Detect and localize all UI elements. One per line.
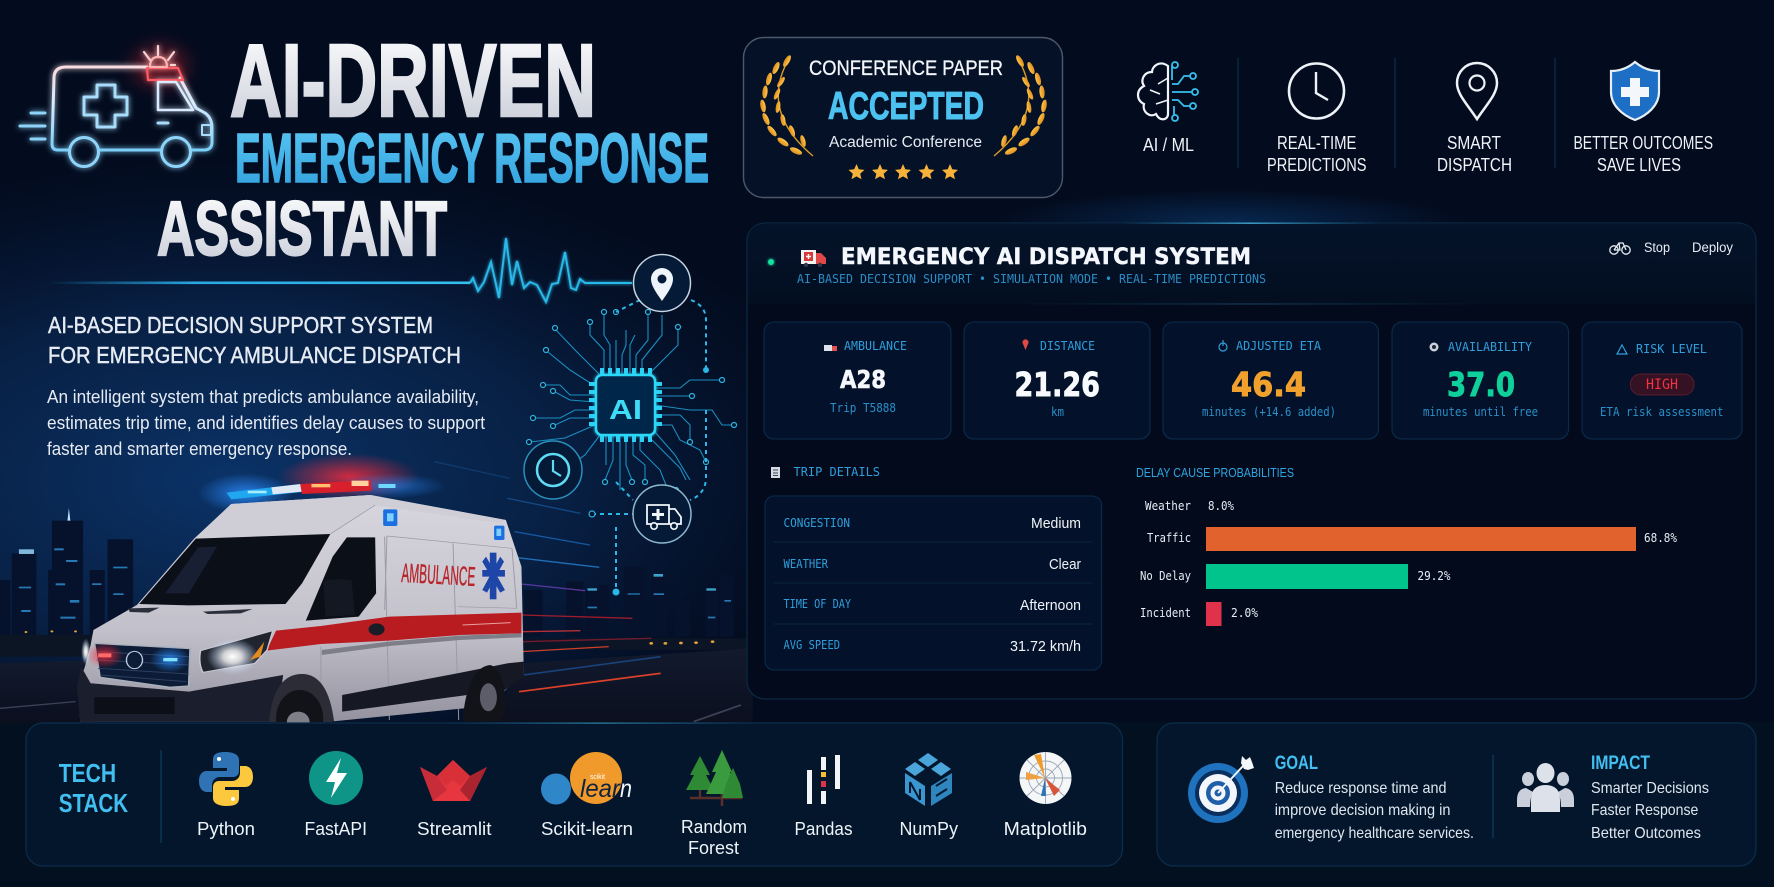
- card: distance: km: [1051, 404, 1064, 419]
- fastapi: [304, 751, 367, 839]
- row: weather: [784, 556, 1081, 573]
- impact text: Better Outcomes: [1591, 825, 1701, 842]
- real-time feature: REAL-TIME: [1277, 132, 1356, 153]
- grille: [94, 643, 190, 687]
- ambulance emoji: [801, 250, 826, 267]
- people icon: [1517, 763, 1574, 812]
- conference paper badge: [744, 38, 1062, 198]
- target icon: [1188, 756, 1254, 823]
- road and barrier: [0, 462, 753, 723]
- heartbeat line: [47, 238, 632, 302]
- smart dispatch feature: [1437, 63, 1512, 175]
- clock node: [524, 441, 582, 499]
- ambulance node: [633, 485, 691, 543]
- ambulance photo illustration: [77, 453, 524, 747]
- bar: traffic: 68.8%: [1644, 530, 1677, 545]
- side lights: [383, 509, 397, 526]
- card: ambulance: [764, 322, 951, 439]
- fastapi: FastAPI: [304, 818, 367, 839]
- row: congestion: CONGESTION: [784, 515, 850, 530]
- hood vents: [128, 608, 252, 614]
- ambulance photo illustration: AMBULANCE: [401, 558, 476, 592]
- python: [197, 752, 255, 839]
- smart dispatch feature: DISPATCH: [1437, 154, 1512, 175]
- random forest: [681, 750, 747, 858]
- headlight: [200, 631, 273, 672]
- card: availability: minutes until free: [1423, 404, 1538, 419]
- row: time of day: Afternoon: [1020, 597, 1081, 614]
- star of life: [482, 553, 505, 599]
- red stripe: [267, 613, 521, 651]
- card: risk level: RISK LEVEL: [1636, 341, 1707, 356]
- subtitle: FOR EMERGENCY AMBULANCE DISPATCH: [48, 342, 461, 368]
- card: adjusted ETA: ADJUSTED ETA: [1236, 338, 1321, 353]
- card: distance: DISTANCE: [1040, 338, 1095, 353]
- card: ambulance: Trip T5888: [830, 400, 896, 415]
- neon ambulance icon: [20, 46, 212, 166]
- pandas: [794, 755, 852, 839]
- card: risk level: [1582, 322, 1742, 439]
- goal text: GOAL: [1275, 753, 1318, 774]
- row: weather: Clear: [1049, 556, 1081, 573]
- bar: no delay: No Delay: [1140, 568, 1191, 583]
- windshield: [139, 534, 330, 605]
- random forest: Forest: [688, 837, 739, 858]
- AI / ML feature: [1138, 62, 1198, 155]
- impact text: IMPACT: [1591, 753, 1650, 774]
- scikit-learn: n: [620, 775, 632, 803]
- bar: weather: Weather: [1145, 498, 1191, 513]
- card: adjusted ETA: 46.4: [1231, 365, 1306, 404]
- card: availability: AVAILABILITY: [1448, 339, 1532, 354]
- lower dark panel: [342, 662, 524, 712]
- scikit-learn: [541, 752, 633, 839]
- bar: no delay: [1140, 564, 1451, 589]
- bar: incident: Incident: [1140, 605, 1191, 620]
- smart dispatch feature: SMART: [1447, 132, 1501, 153]
- goal text: improve decision making in: [1275, 802, 1450, 819]
- description text: [47, 386, 485, 459]
- mirror: [323, 579, 355, 617]
- impact text: Smarter Decisions: [1591, 780, 1709, 797]
- better outcomes feature: BETTER OUTCOMES: [1574, 132, 1713, 153]
- title: EMERGENCY RESPONSE: [235, 119, 709, 197]
- title: AI-DRIVEN: [230, 23, 596, 138]
- feature icons row: [1138, 58, 1713, 175]
- bar: traffic: Traffic: [1147, 530, 1191, 545]
- five stars: [848, 164, 958, 179]
- row: avg speed: [784, 637, 1081, 655]
- tech stack heading: [59, 758, 128, 818]
- dashboard panel: emergency AI dispatch system: [747, 222, 1756, 699]
- risk pill: HIGH: [1646, 377, 1678, 393]
- card: adjusted ETA: minutes (+14.6 added): [1202, 404, 1336, 419]
- card: ambulance: AMBULANCE: [844, 338, 907, 353]
- stop and deploy controls: Deploy: [1692, 240, 1733, 255]
- matplotlib: Matplotlib: [1004, 818, 1087, 839]
- wheels: [269, 674, 334, 722]
- impact text: [1591, 753, 1709, 842]
- light bar: [227, 484, 302, 499]
- pandas: Pandas: [794, 818, 852, 839]
- status dot: [768, 259, 774, 265]
- dashboard header: EMERGENCY AI DISPATCH SYSTEM: [841, 245, 1251, 270]
- numpy: NumPy: [900, 818, 959, 839]
- goal text: [1275, 753, 1474, 842]
- panel: tech stack: [26, 722, 1122, 866]
- goal text: emergency healthcare services.: [1275, 825, 1474, 842]
- scikit-learn: scikit: [590, 774, 605, 781]
- title: [157, 23, 709, 272]
- circuit traces: [526, 300, 736, 596]
- impact text: Faster Response: [1591, 802, 1698, 819]
- van body: [78, 495, 524, 722]
- conference paper badge: ACCEPTED: [828, 85, 984, 128]
- tech stack heading: TECH: [59, 758, 116, 788]
- streamlit: Streamlit: [417, 818, 492, 839]
- row: congestion: [784, 515, 1081, 532]
- subtitle: [48, 312, 461, 368]
- stop and deploy controls: [1610, 240, 1733, 255]
- skyline: [0, 508, 734, 637]
- real-time feature: [1267, 64, 1366, 175]
- card: risk level: ETA risk assessment: [1600, 404, 1724, 419]
- conference paper badge: Academic Conference: [829, 134, 982, 151]
- scikit-learn: lear: [580, 775, 622, 803]
- row: congestion: Medium: [1031, 515, 1081, 532]
- delay cause bar chart: [1136, 466, 1677, 626]
- clipboard icon: [771, 467, 780, 478]
- random forest: Random: [681, 816, 747, 837]
- row: time of day: [784, 596, 1081, 614]
- goal text: Reduce response time and: [1275, 780, 1446, 797]
- bar: weather: 8.0%: [1208, 498, 1234, 513]
- description text: An intelligent system that predicts ambulance availability,: [47, 386, 479, 407]
- bar: weather: [1145, 498, 1234, 513]
- card: availability: [1392, 322, 1568, 439]
- matplotlib: [1004, 752, 1087, 839]
- stop and deploy controls: Stop: [1644, 240, 1670, 255]
- AI chip: [589, 368, 662, 442]
- description text: estimates trip time, and identifies delay causes to support: [47, 412, 485, 433]
- AI / ML feature: AI / ML: [1143, 134, 1194, 155]
- panel: goal and impact: [1157, 723, 1756, 866]
- better outcomes feature: [1574, 62, 1713, 175]
- scikit-learn: Scikit-learn: [541, 818, 633, 839]
- card: availability: 37.0: [1447, 365, 1515, 404]
- card: ambulance: A28: [840, 365, 886, 394]
- better outcomes feature: SAVE LIVES: [1597, 154, 1681, 175]
- side window: [306, 537, 376, 621]
- trip details section: [765, 464, 1102, 670]
- night city scene: [0, 453, 753, 747]
- bar: no delay: 29.2%: [1418, 568, 1451, 583]
- AI circuit diagram: [524, 254, 736, 596]
- conference paper badge: CONFERENCE PAPER: [809, 57, 1003, 80]
- card: distance: 21.26: [1014, 365, 1100, 404]
- bar: incident: 2.0%: [1231, 605, 1258, 620]
- risk pill: [1630, 374, 1694, 395]
- trip details section: TRIP DETAILS: [794, 464, 880, 479]
- row: avg speed: AVG SPEED: [784, 637, 840, 652]
- title: ASSISTANT: [157, 186, 447, 272]
- python: Python: [197, 818, 255, 839]
- dashboard header: [748, 222, 1755, 304]
- AI chip: AI: [609, 394, 642, 425]
- dashboard header: AI-BASED DECISION SUPPORT • SIMULATION MODE • REAL-TIME PREDICTIONS: [797, 272, 1266, 286]
- description text: faster and smarter emergency response.: [47, 438, 352, 459]
- delay cause bar chart: DELAY CAUSE PROBABILITIES: [1136, 466, 1294, 480]
- tech stack heading: STACK: [59, 788, 128, 818]
- numpy: [900, 753, 959, 839]
- card: distance: [964, 322, 1150, 439]
- card: adjusted ETA: [1163, 322, 1378, 439]
- real-time feature: PREDICTIONS: [1267, 154, 1366, 175]
- subtitle: AI-BASED DECISION SUPPORT SYSTEM: [48, 312, 433, 338]
- laurel wreath: [759, 54, 1048, 156]
- row: weather: WEATHER: [784, 556, 828, 571]
- location node: [634, 254, 690, 312]
- row: avg speed: 31.72 km/h: [1010, 638, 1081, 655]
- bar: traffic: [1147, 527, 1677, 551]
- row: time of day: TIME OF DAY: [784, 596, 851, 611]
- streamlit: [417, 760, 492, 839]
- bar: incident: [1140, 602, 1258, 626]
